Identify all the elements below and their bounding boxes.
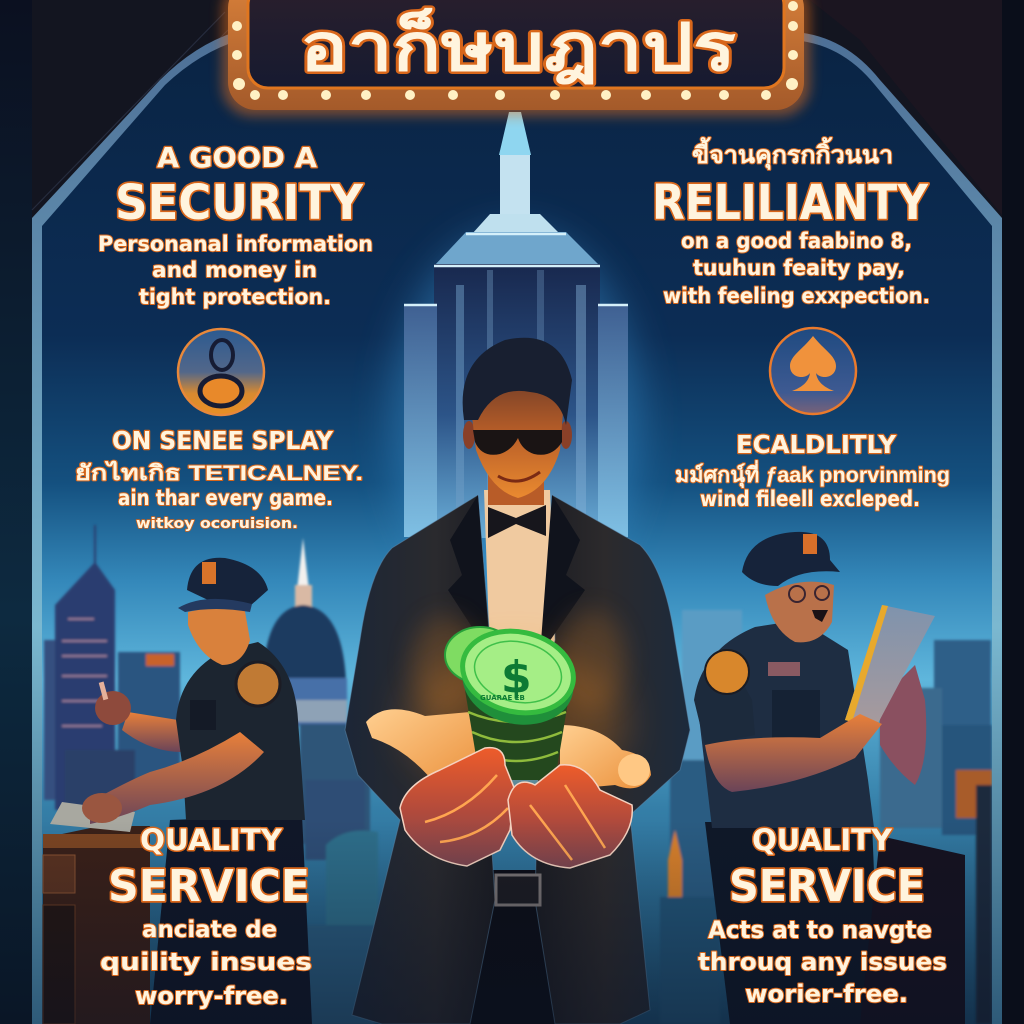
text block: escalation: wind fileell excleped. <box>700 487 920 511</box>
torso <box>697 620 874 828</box>
shirt pockets <box>190 700 216 730</box>
thumb tip <box>618 754 650 786</box>
text block: quality service left: SERVICE <box>108 861 310 912</box>
right sleeve highlight <box>558 610 626 710</box>
text block: reliability: tuuhun feaity pay, <box>693 256 905 280</box>
sleeve <box>694 650 755 745</box>
text block: quality service right: Acts at to navgte <box>708 916 932 944</box>
lapels <box>448 495 490 655</box>
tablet <box>845 605 935 727</box>
text block: security: A GOOD A <box>157 141 317 174</box>
moustache <box>812 610 828 622</box>
icon: spade badge <box>770 328 856 414</box>
right lower hand <box>508 765 632 868</box>
hair <box>463 338 572 425</box>
text block: quality service right: worier-free. <box>745 980 908 1008</box>
glasses <box>789 586 829 602</box>
text block: security: SECURITY <box>115 175 364 231</box>
patch <box>705 650 749 694</box>
text block: on sense play: ON SENEE SPLAY <box>112 426 334 455</box>
left upper hand <box>366 709 480 790</box>
belt buckle <box>496 875 540 905</box>
text block: escalation: ECALDLITLY <box>736 430 897 459</box>
left skyline buildings <box>44 525 378 1024</box>
text block: escalation: มม์ศกนุ์ที่ ƒaak pnorvinming <box>675 459 950 489</box>
left finger creases <box>425 775 508 842</box>
desk <box>43 826 150 1024</box>
pockets <box>768 662 800 676</box>
pants <box>150 815 312 1024</box>
face <box>765 582 834 642</box>
text block: on sense play: ain thar every game. <box>118 486 333 510</box>
trousers <box>440 870 600 1024</box>
sign glow <box>222 0 810 116</box>
smile <box>498 472 540 481</box>
cap <box>187 558 268 606</box>
back arm <box>880 665 926 785</box>
text block: security: Personanal information <box>98 232 373 256</box>
text block: reliability <box>652 136 930 308</box>
text block: on sense play: witkoy ocoruision. <box>136 516 298 532</box>
text block: quality service right <box>698 823 947 1008</box>
left guard and desk <box>43 558 312 1024</box>
pants <box>705 822 880 1024</box>
shirt <box>484 490 556 660</box>
front arm <box>705 714 882 792</box>
coin stack: GUARAE EB <box>480 694 525 702</box>
text block: quality service left: quility insues <box>100 948 312 976</box>
text block: quality service right: QUALITY <box>752 823 893 857</box>
text block: on sense play <box>75 426 363 532</box>
text block: quality service right: throuq any issues <box>698 948 947 976</box>
warm chest glow <box>405 650 625 790</box>
left lower hand <box>400 748 515 866</box>
text block: reliability: with feeling exxpection. <box>663 284 930 308</box>
central skyscraper <box>404 112 628 538</box>
text block: quality service right: SERVICE <box>729 861 925 912</box>
ears <box>463 421 572 449</box>
lower arm <box>90 732 264 824</box>
right upper hand <box>560 725 651 790</box>
icon: security badge <box>178 329 264 415</box>
desk block <box>860 836 965 1024</box>
tower glow <box>391 230 641 610</box>
text block: reliability: on a good faabino 8, <box>681 229 912 253</box>
text block: quality service left: worry-free. <box>135 982 288 1010</box>
text block: security: and money in <box>152 258 317 282</box>
patch <box>236 662 280 706</box>
text block: quality service left <box>100 823 312 1010</box>
face <box>188 600 250 665</box>
text block: quality service left: QUALITY <box>140 823 283 857</box>
raised arm <box>122 712 182 752</box>
central host figure <box>345 338 690 1024</box>
text block: security: tight protection. <box>139 285 331 309</box>
bow tie <box>488 505 546 538</box>
right finger creases <box>530 785 605 860</box>
sign title: อาก็ษบฎาปร <box>300 7 736 85</box>
jacket left <box>345 495 495 1024</box>
coin stack: $ <box>501 652 532 703</box>
text block: quality service left: anciate de <box>142 917 277 943</box>
text block: escalation <box>675 430 950 511</box>
head <box>470 355 564 498</box>
sleeve highlights <box>411 615 479 715</box>
text block: on sense play: ยักไทเกิธ TETICALNEY. <box>75 460 363 485</box>
cash <box>50 802 135 832</box>
right guard <box>694 532 965 1024</box>
torso <box>176 642 305 820</box>
text block: security <box>98 141 373 309</box>
bottom fade <box>42 820 992 1024</box>
neck <box>488 470 544 505</box>
sign: thai title marquee <box>228 0 804 110</box>
cap <box>742 532 840 586</box>
jacket right <box>535 495 690 1024</box>
coin stack <box>445 621 582 780</box>
text block: reliability: ขี้จานคุกรกกิ้วนนา <box>692 136 893 171</box>
sign bulbs <box>232 1 798 100</box>
text block: reliability: RELILIANTY <box>652 175 929 231</box>
right skyline buildings <box>660 610 992 1024</box>
sunglasses <box>473 430 562 455</box>
